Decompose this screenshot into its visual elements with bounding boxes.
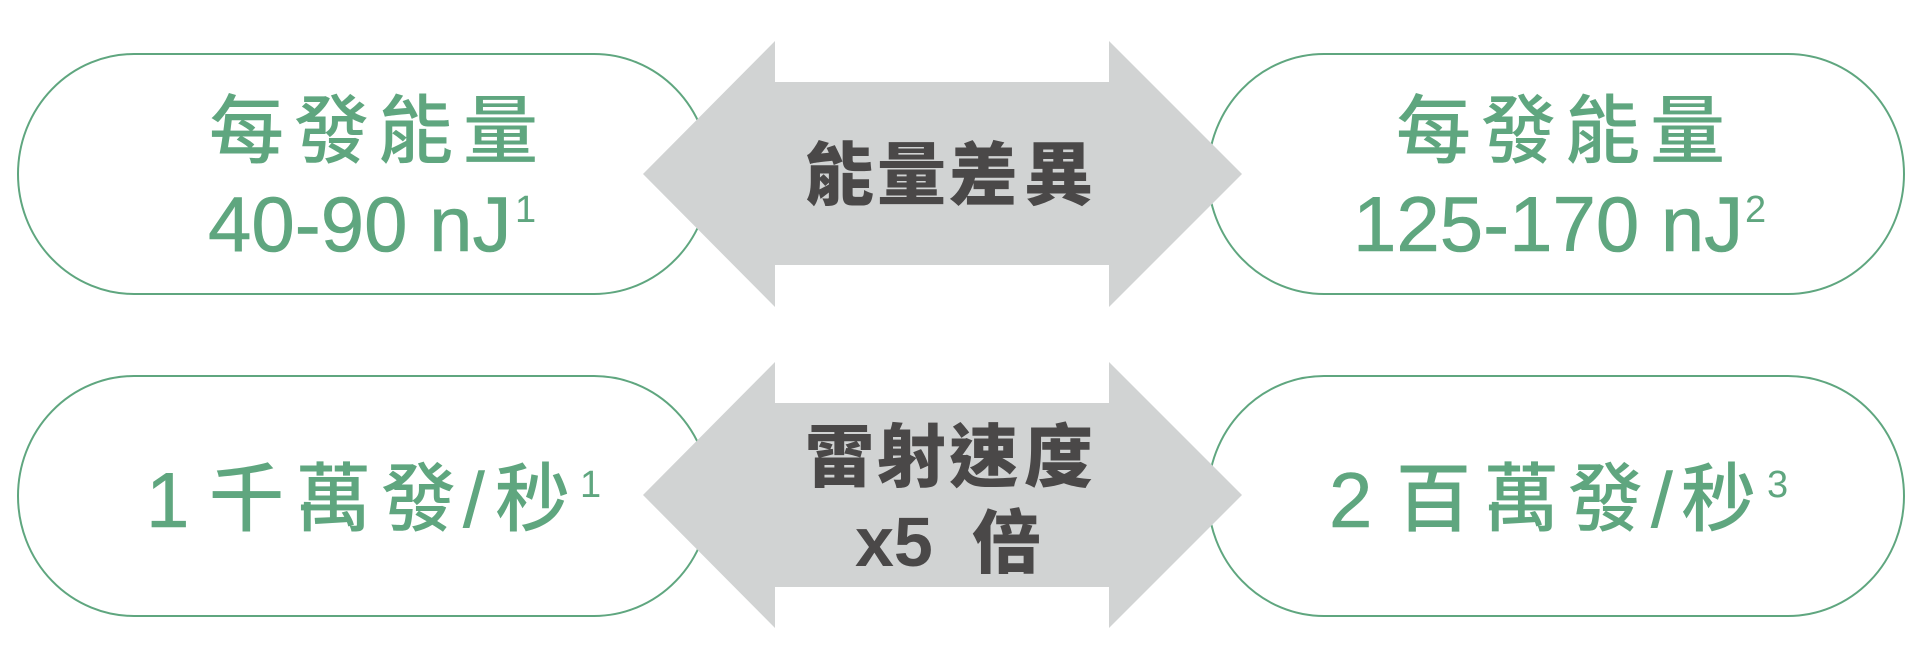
text: speed value left: 1 <box>146 456 189 544</box>
text: energy per pulse label right: 每發能量 <box>1396 70 1725 179</box>
text: times five: 倍 <box>972 487 1041 587</box>
text: speed value right: / <box>1651 456 1673 544</box>
text: speed value left: 1 <box>580 464 601 506</box>
text: speed value left: / <box>463 456 485 544</box>
text: energy value right: 125-170 nJ <box>1353 180 1743 268</box>
text: speed value left <box>146 438 601 547</box>
text: speed value left: 秒 <box>495 438 570 547</box>
text: speed value right <box>1329 438 1788 547</box>
arrow: energy difference double arrow <box>643 41 1242 307</box>
arrow: laser speed double arrow <box>643 362 1242 628</box>
panel: left energy pill <box>18 54 710 294</box>
text: energy value right: 2 <box>1745 189 1766 231</box>
text: speed value right: 百萬發 <box>1396 438 1643 547</box>
text: energy value left: 40-90 nJ <box>208 180 512 268</box>
text: speed value right: 2 <box>1329 456 1372 544</box>
panel: right energy pill <box>1208 54 1904 294</box>
text: speed value left: 千萬發 <box>209 438 456 547</box>
text: energy value left: 1 <box>515 189 536 231</box>
text: laser speed: 雷射速度 <box>805 401 1093 501</box>
text: energy difference: 能量差異 <box>805 119 1093 219</box>
text: speed value right: 秒 <box>1681 438 1756 547</box>
panel: left speed pill <box>18 376 710 616</box>
text: times five <box>855 487 1041 587</box>
text: times five: x5 <box>855 503 933 581</box>
panel: right speed pill <box>1208 376 1904 616</box>
text: energy per pulse label: 每發能量 <box>209 70 538 179</box>
text: speed value right: 3 <box>1767 464 1788 506</box>
